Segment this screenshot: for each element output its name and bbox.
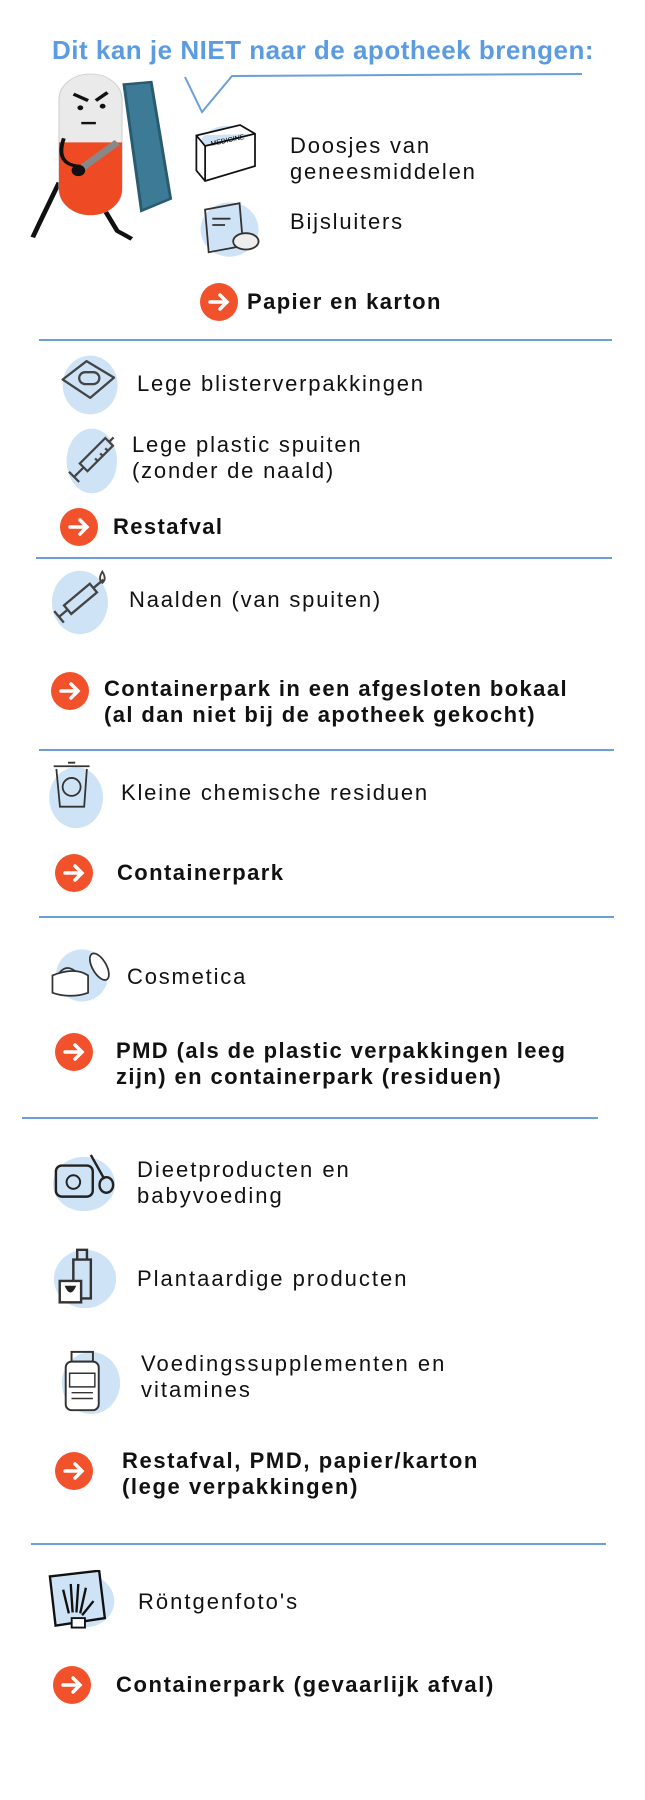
icon: syringe — [66, 428, 117, 494]
text: dieet: babyvoeding — [137, 1183, 284, 1208]
result: PMD: zijn) en containerpark (residuen) — [116, 1064, 502, 1089]
icon: cosmetics jar — [52, 949, 110, 1002]
icon: bijsluiter — [200, 202, 260, 257]
icon: arrow — [55, 854, 93, 892]
icon: medicine box — [196, 124, 256, 182]
text: rontgen: Röntgenfoto's — [138, 1589, 299, 1614]
icon: vitamins — [62, 1350, 120, 1414]
result: gevaarlijk afval — [53, 1666, 495, 1704]
result: containerpark bokaal — [51, 672, 568, 727]
text: dieet — [137, 1157, 351, 1208]
result: containerpark bokaal: (al dan niet bij de apotheek gekocht) — [104, 702, 536, 727]
text: bijsluiters: Bijsluiters — [290, 209, 404, 234]
text: spuiten: Lege plastic spuiten — [132, 432, 362, 457]
text: chemisch: Kleine chemische residuen — [121, 780, 429, 805]
text: doosjes: Doosjes van — [290, 133, 431, 158]
icon: xray — [48, 1570, 114, 1629]
text: naalden: Naalden (van spuiten) — [129, 587, 382, 612]
result: gevaarlijk afval: Containerpark (gevaarlijk afval) — [116, 1672, 495, 1697]
result: restafval — [60, 508, 223, 546]
text: vitamines — [141, 1351, 446, 1402]
icon: arrow — [60, 508, 98, 546]
text: blister: Lege blisterverpakkingen — [137, 371, 425, 396]
result: PMD — [55, 1033, 566, 1089]
text: spuiten — [132, 432, 362, 483]
result: containerpark: Containerpark — [117, 860, 284, 885]
icon: needle — [52, 570, 108, 634]
title: Dit kan je NIET naar de apotheek brengen: — [52, 35, 594, 65]
result: restafval pmd: (lege verpakkingen) — [122, 1474, 359, 1499]
icon: chemical bin — [49, 762, 103, 828]
speech bubble line — [184, 73, 582, 114]
result: containerpark bokaal: Containerpark in een afgesloten bokaal — [104, 676, 568, 701]
result: PMD: PMD (als de plastic verpakkingen leeg — [116, 1038, 566, 1063]
icon: baby food — [53, 1154, 115, 1212]
result: restafval pmd — [55, 1448, 479, 1499]
icon: arrow — [55, 1452, 93, 1490]
result: restafval: Restafval — [113, 514, 223, 539]
icon: arrow — [55, 1033, 93, 1071]
text: plant: Plantaardige producten — [137, 1266, 408, 1291]
icon: arrow — [51, 672, 89, 710]
text: doosjes: geneesmiddelen — [290, 159, 477, 184]
result: papier en karton — [200, 283, 442, 321]
text: spuiten: (zonder de naald) — [132, 458, 335, 483]
text: cosmetica: Cosmetica — [127, 964, 247, 989]
result: containerpark — [55, 854, 284, 892]
text: doosjes — [290, 133, 477, 184]
result: papier en karton: Papier en karton — [247, 289, 442, 314]
text: vitamines: Voedingssupplementen en — [141, 1351, 446, 1376]
icon: medicine box: MEDICINE — [210, 134, 245, 148]
icon: plant products — [54, 1248, 116, 1308]
result: restafval pmd: Restafval, PMD, papier/karton — [122, 1448, 479, 1473]
text: vitamines: vitamines — [141, 1377, 252, 1402]
text: dieet: Dieetproducten en — [137, 1157, 351, 1182]
icon: blister — [62, 356, 118, 414]
icon: arrow — [53, 1666, 91, 1704]
icon: arrow — [200, 283, 238, 321]
icon: pill character — [30, 74, 172, 241]
